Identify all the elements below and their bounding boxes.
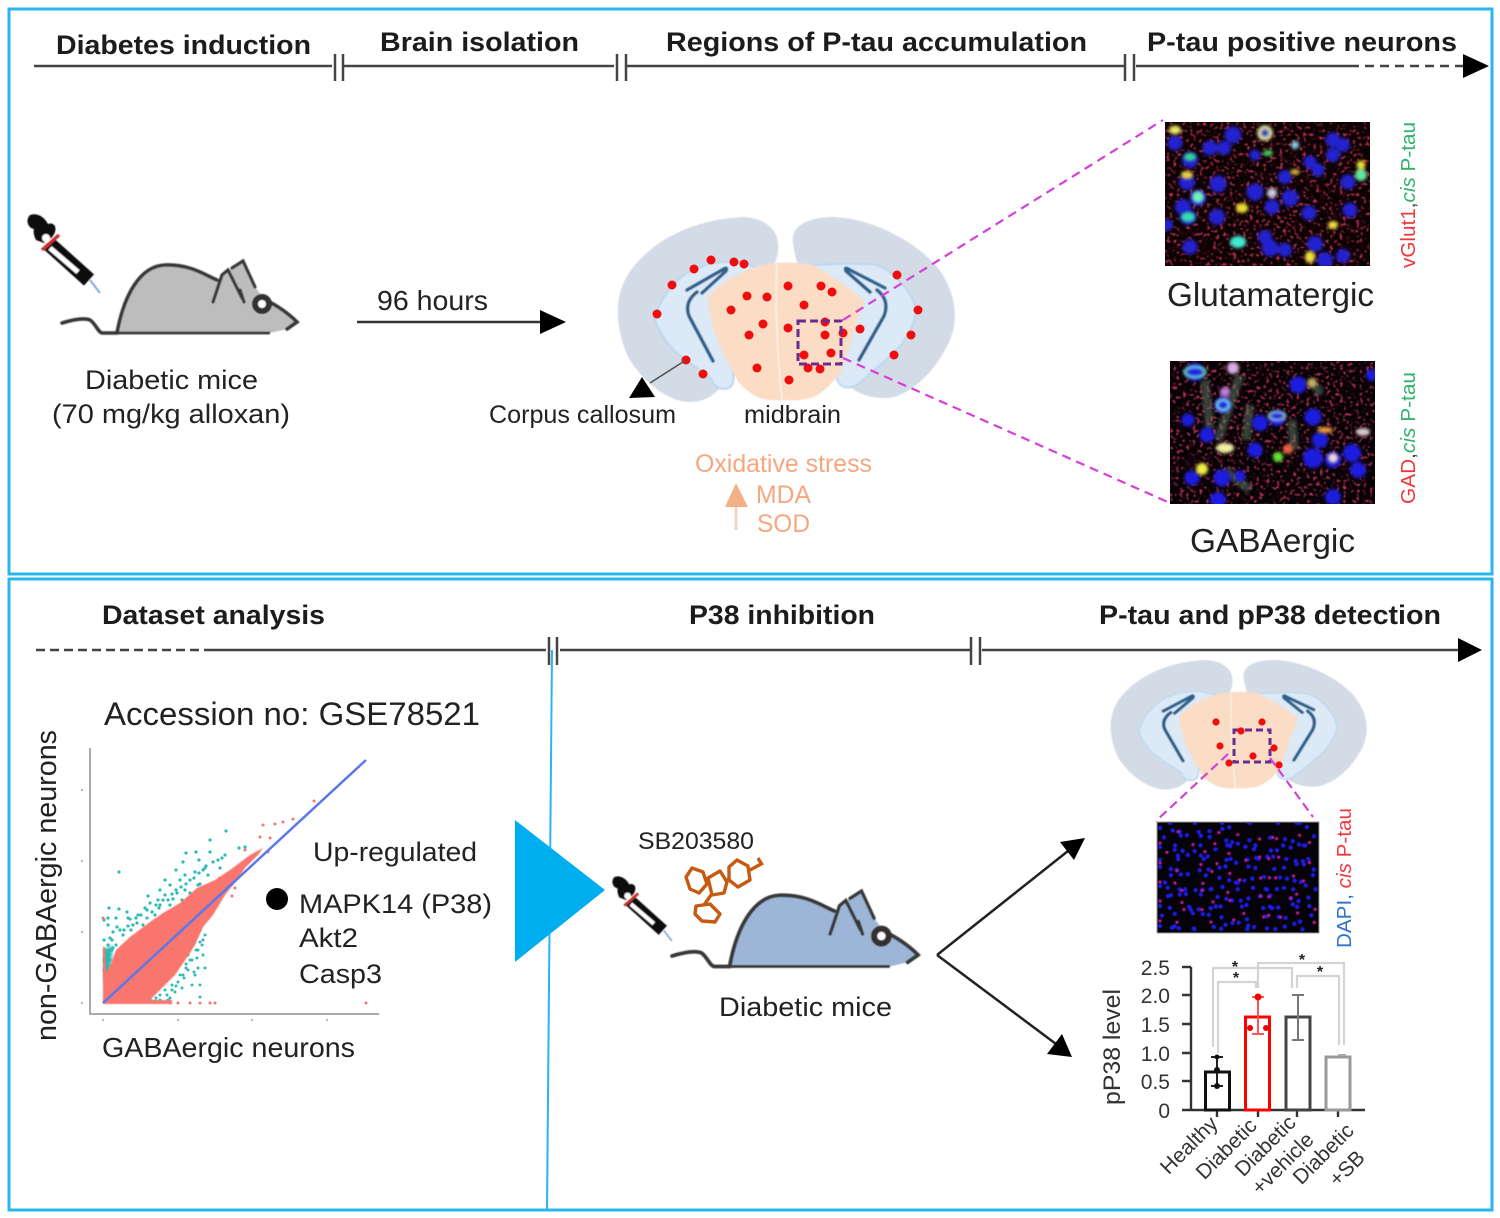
icon: grey mouse — [62, 261, 297, 333]
label: DAPI, cis P-tau: DAPI, cis P-tau — [1334, 808, 1356, 948]
icon: SB203580 molecule — [686, 858, 763, 922]
arrow: top timeline — [34, 54, 1489, 81]
label: midbrain: midbrain — [744, 401, 841, 429]
y axis: 1.5 — [1141, 1014, 1170, 1037]
label: Diabetic mice: Diabetic mice — [719, 992, 892, 1022]
x axis labels: Healthy — [1156, 1112, 1223, 1179]
label: vGlut1, cis P-tau: vGlut1,cis P-tau — [1398, 122, 1420, 268]
micrograph: glutamatergic neurons — [1161, 122, 1370, 268]
arrow: bottom timeline — [36, 637, 1482, 665]
icon: syringe with SB203580 — [612, 876, 672, 941]
x axis labels — [1156, 1111, 1370, 1199]
heading: P-tau positive neurons: P-tau positive neurons — [1147, 27, 1457, 57]
panel: dataset analysis to detection — [9, 579, 1492, 1210]
text block: up-regulated genes: Casp3 — [299, 959, 382, 989]
heading: Brain isolation: Brain isolation — [380, 27, 579, 57]
micrograph: DAPI and cis P-tau — [1157, 819, 1319, 933]
x axis labels: +vehicle — [1247, 1128, 1319, 1199]
arrow: branch up to detection — [937, 838, 1085, 955]
text block: up-regulated genes: Akt2 — [299, 923, 358, 953]
icon: syringe — [27, 214, 100, 293]
bar: Diabetic SB — [1326, 1055, 1350, 1110]
label: y axis non-GABAergic neurons: non-GABAergic neurons — [31, 730, 63, 1041]
x axis labels: Diabetic — [1231, 1111, 1301, 1181]
panel: diabetes induction to P-tau positive neurons — [9, 9, 1492, 574]
icon: blue mouse — [672, 891, 918, 966]
text block: Oxidative stress: Oxidative stress — [695, 450, 872, 478]
significance brackets: * — [1299, 952, 1306, 969]
y axis: 0.5 — [1141, 1071, 1170, 1094]
y axis — [1141, 957, 1365, 1123]
label: Glutamatergic: Glutamatergic — [1167, 276, 1374, 313]
text block: Oxidative stress — [695, 450, 872, 538]
text block: up-regulated genes: Up-regulated — [313, 837, 477, 867]
text block: Oxidative stress: SOD — [757, 510, 810, 538]
y axis: 0 — [1158, 1100, 1170, 1123]
x axis labels: +SB — [1325, 1146, 1370, 1191]
bar: Healthy — [1206, 1054, 1230, 1110]
significance brackets: * — [1232, 959, 1239, 976]
heading: Diabetes induction: Diabetes induction — [56, 30, 311, 60]
label: accession number: Accession no: GSE78521 — [104, 696, 480, 732]
callout: zoom lines to micrographs — [843, 120, 1170, 503]
chart: scatter plot — [81, 748, 379, 1021]
label: x axis GABAergic neurons: GABAergic neurons — [102, 1032, 355, 1063]
callout: zoom lines to DAPI image — [1156, 754, 1313, 821]
y axis: 2.5 — [1141, 957, 1170, 980]
bar: Diabetic vehicle — [1286, 995, 1310, 1110]
significance brackets — [1213, 952, 1344, 1053]
significance brackets: * — [1233, 970, 1240, 987]
heading: P-tau and pP38 detection: P-tau and pP38 detection — [1099, 600, 1441, 630]
significance brackets: * — [1317, 964, 1324, 981]
label: Corpus callosum pointer: Corpus callosum — [489, 401, 676, 429]
x axis labels: Diabetic — [1289, 1119, 1359, 1189]
y axis: 1.0 — [1141, 1043, 1170, 1066]
chart: pP38 level bars — [1099, 952, 1370, 1199]
arrow: 96 hours — [357, 285, 566, 334]
divider: cyan line — [547, 650, 552, 1210]
diagram: small brain section — [1111, 660, 1367, 790]
label: Corpus callosum pointer — [489, 360, 686, 429]
label: Diabetic mice dose: Diabetic mice — [85, 365, 258, 395]
heading: P38 inhibition: P38 inhibition — [689, 600, 875, 630]
label: GABAergic: GABAergic — [1190, 522, 1355, 559]
micrograph: GABAergic neurons — [1170, 361, 1378, 508]
label: SB203580: SB203580 — [638, 828, 754, 855]
label: Diabetic mice dose: (70 mg/kg alloxan) — [52, 399, 290, 429]
bar: Diabetic — [1246, 994, 1270, 1110]
label: Diabetic mice dose — [52, 365, 290, 429]
text block: up-regulated genes — [266, 837, 492, 989]
label: GAD, cis P-tau: GAD,cis P-tau — [1398, 372, 1420, 504]
text block: up-regulated genes: MAPK14 (P38) — [299, 889, 492, 919]
y axis: 2.0 — [1141, 985, 1170, 1008]
heading: Dataset analysis: Dataset analysis — [102, 600, 325, 630]
arrow: branch down to chart — [937, 955, 1072, 1057]
label: pP38 level axis: pP38 level — [1099, 989, 1126, 1105]
x axis labels: Diabetic — [1192, 1114, 1262, 1184]
text block: Oxidative stress: MDA — [756, 481, 811, 509]
arrow: big blue triangle — [515, 820, 605, 962]
diagram: brain section with P-tau dots — [618, 217, 955, 402]
arrow: 96 hours: 96 hours — [377, 285, 488, 316]
heading: Regions of P-tau accumulation: Regions of P-tau accumulation — [666, 27, 1087, 57]
